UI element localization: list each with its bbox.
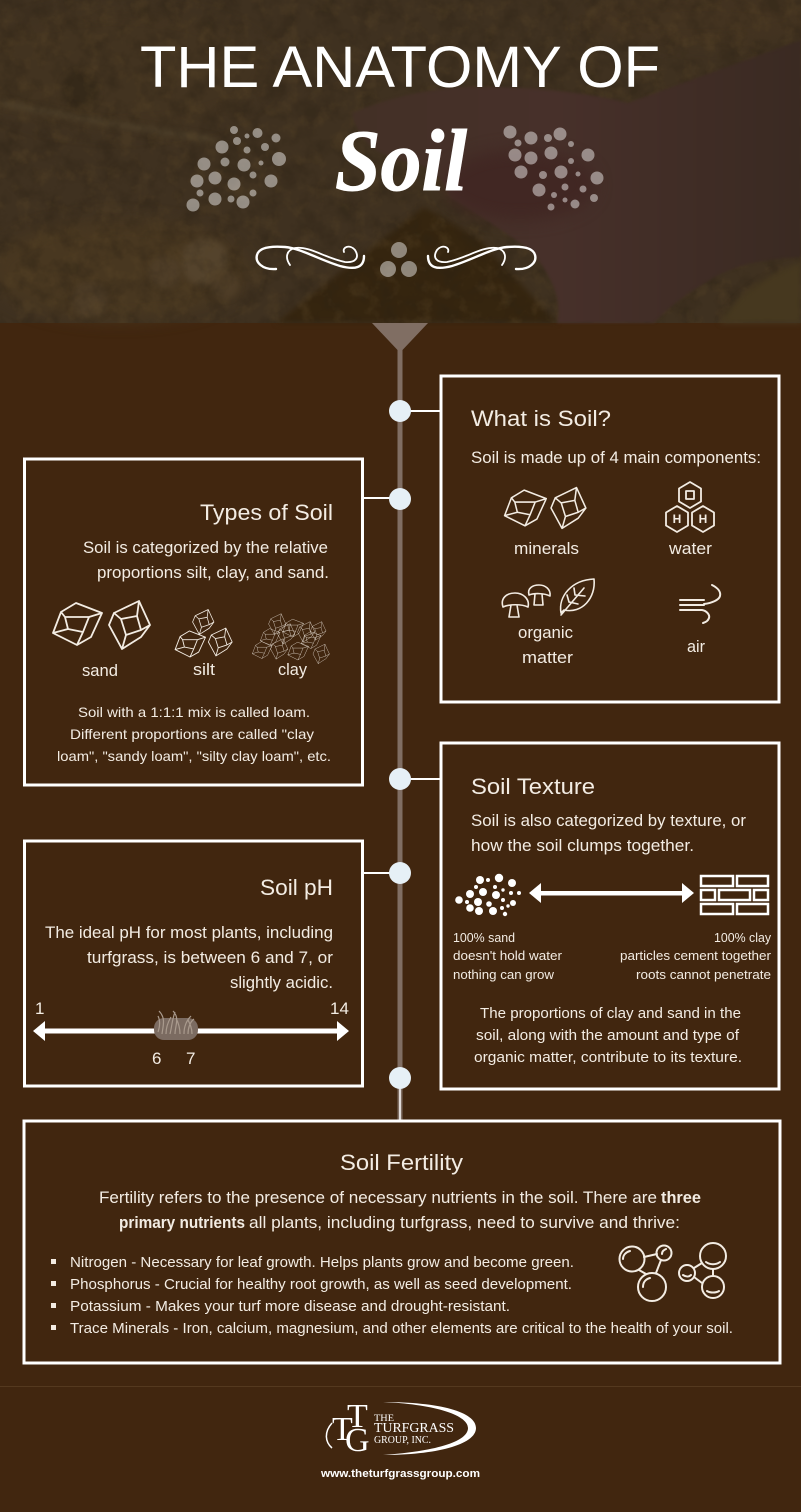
intro text [83, 538, 329, 582]
icon: mushrooms and leaf [502, 579, 594, 617]
logo: The Turfgrass Group: THE [374, 1414, 394, 1424]
website url: www.theturfgrassgroup.com [320, 1468, 480, 1480]
logo: The Turfgrass Group: T [332, 1411, 353, 1448]
heading: what is soil: What is Soil? [471, 406, 611, 431]
panel: types of soil [24, 459, 362, 785]
heading: soil fertility: Soil Fertility [340, 1150, 463, 1175]
scale labels: 1 [35, 999, 44, 1018]
caption: 100% sand: nothing can grow [453, 967, 555, 982]
nutrient list: Trace Minerals - Iron, calcium, magnesium, and other elements are critical to the health of your soil. [70, 1320, 733, 1337]
icon: molecules [620, 1243, 726, 1301]
closing text: soil, along with the amount and type of [476, 1027, 740, 1044]
ornament: swirls and three dots [257, 242, 535, 277]
logo: The Turfgrass Group: G [345, 1422, 370, 1459]
arrow: pH scale [33, 1021, 349, 1041]
label: silt: silt [193, 660, 215, 679]
label: organic matter: matter [522, 648, 573, 667]
intro text: proportions silt, clay, and sand. [97, 563, 329, 582]
icon: grass [154, 1011, 198, 1040]
panel: soil texture [441, 743, 779, 1089]
label: sand: sand [82, 661, 118, 680]
caption: 100% sand: doesn't hold water [453, 948, 563, 963]
body text: turfgrass, is between 6 and 7, or [87, 948, 333, 967]
body text [45, 923, 333, 992]
logo: The Turfgrass Group: T [347, 1398, 368, 1435]
scale labels: 7 [186, 1049, 195, 1068]
title [140, 35, 660, 210]
label: clay: clay [278, 660, 307, 679]
caption: 100% clay [620, 930, 772, 982]
intro text: Soil is made up of 4 main components: [471, 448, 761, 467]
title: THE ANATOMY OF [140, 35, 660, 100]
icon: air [680, 585, 720, 623]
nutrient list: Nitrogen - Necessary for leaf growth. Helps plants grow and become green. [70, 1254, 574, 1271]
heading: soil texture: Soil Texture [471, 774, 595, 799]
logo: The Turfgrass Group: TURFGRASS [374, 1421, 454, 1436]
intro text: all plants, including turfgrass, need to survive and thrive: [249, 1213, 680, 1232]
caption: 100% clay: roots cannot penetrate [636, 967, 771, 982]
heading: types of soil: Types of Soil [200, 500, 333, 525]
body text: The ideal pH for most plants, including [45, 923, 333, 942]
closing text [474, 1005, 742, 1066]
panel: what is soil [441, 376, 779, 702]
heading: soil pH: Soil pH [260, 875, 333, 900]
timeline [364, 323, 440, 1120]
icon: sand particles [455, 874, 521, 916]
panel: soil fertility [24, 1121, 780, 1363]
logo: The Turfgrass Group [326, 1398, 476, 1459]
loam text [57, 704, 331, 764]
scale labels [35, 999, 349, 1068]
intro text: Fertility refers to the presence of necessary nutrients in the soil. There are [99, 1188, 657, 1207]
icon: minerals [505, 488, 586, 528]
caption: 100% sand: 100% sand [453, 930, 515, 945]
intro text: Soil is categorized by the relative [83, 538, 328, 557]
intro text: primary nutrients [119, 1213, 245, 1232]
icon: water molecule: H [673, 512, 681, 526]
icon: water molecule [666, 482, 714, 532]
intro text [471, 811, 746, 855]
label: air: air [687, 637, 705, 656]
intro text: how the soil clumps together. [471, 836, 694, 855]
closing text: organic matter, contribute to its texture. [474, 1049, 742, 1066]
icon: clay [252, 614, 329, 664]
label: water: water [668, 539, 712, 558]
scale labels: 14 [330, 999, 349, 1018]
icon: silt [175, 610, 232, 657]
body text: slightly acidic. [230, 973, 333, 992]
title: Soil [335, 113, 468, 210]
loam text: Different proportions are called "clay [70, 726, 314, 742]
logo: The Turfgrass Group: GROUP, INC. [374, 1435, 431, 1446]
nutrient list [51, 1254, 733, 1337]
nutrient list: Phosphorus - Crucial for healthy root growth, as well as seed development. [70, 1276, 572, 1293]
caption: 100% clay: particles cement together [620, 948, 772, 963]
arrow: sand to clay [529, 883, 694, 903]
intro text: three [661, 1188, 701, 1207]
loam text: loam", "sandy loam", "silty clay loam", etc. [57, 748, 331, 764]
icon: water molecule: H [699, 512, 707, 526]
icon: right dot cluster [504, 126, 604, 210]
intro text: Soil is also categorized by texture, or [471, 811, 746, 830]
label: organic matter [518, 623, 573, 667]
scale labels: 6 [152, 1049, 161, 1068]
label: organic matter: organic [518, 623, 573, 642]
icon: bricks [701, 876, 768, 914]
hero photo: hand holding soil [0, 0, 801, 323]
footer divider [0, 1386, 801, 1387]
icon: sand [53, 601, 150, 649]
icon: left dot cluster [186, 126, 286, 212]
closing text: The proportions of clay and sand in the [480, 1005, 741, 1022]
nutrient list: Potassium - Makes your turf more disease and drought-resistant. [70, 1298, 510, 1315]
caption: 100% clay: 100% clay [714, 930, 771, 945]
panel: soil pH [24, 841, 362, 1086]
caption: 100% sand [453, 930, 563, 982]
label: minerals: minerals [514, 539, 579, 558]
loam text: Soil with a 1:1:1 mix is called loam. [78, 704, 310, 720]
intro text [99, 1188, 701, 1232]
